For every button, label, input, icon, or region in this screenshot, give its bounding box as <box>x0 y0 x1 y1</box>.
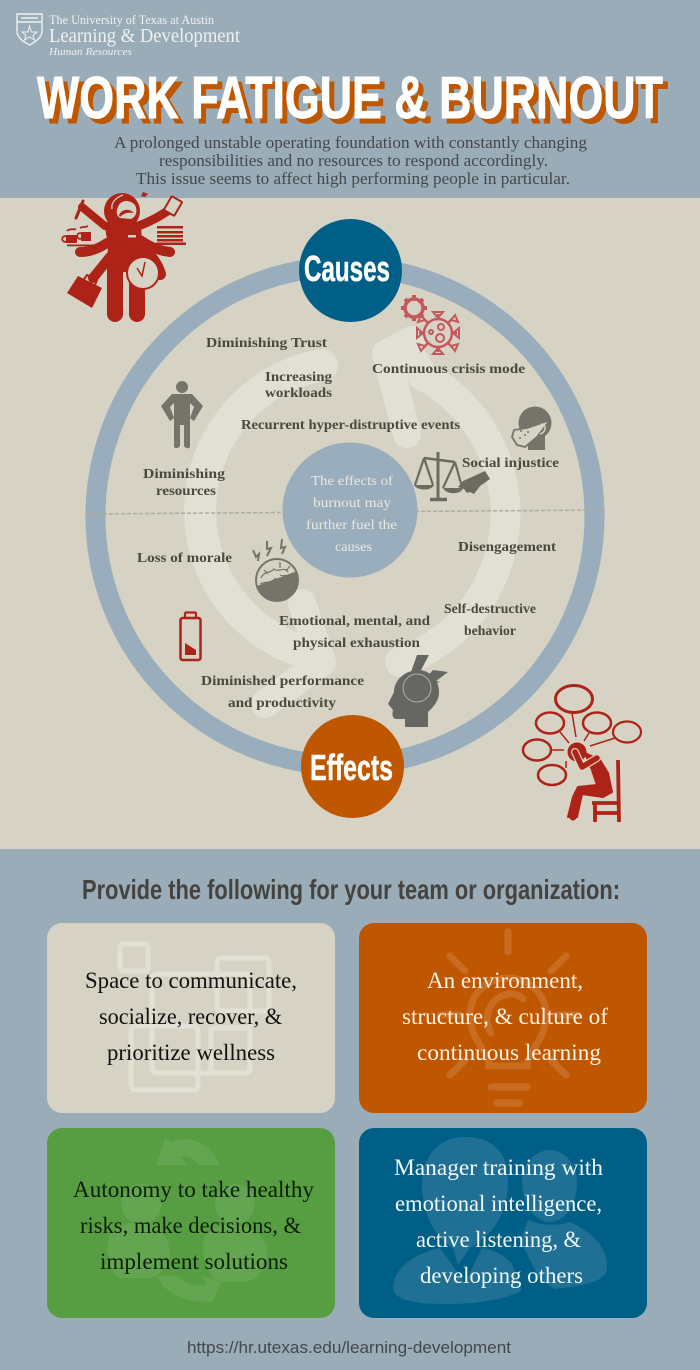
center circle: The effects of <box>311 474 393 489</box>
label: diminishing resources: Diminishing <box>143 467 225 482</box>
icon: room blocks <box>120 944 269 1090</box>
icon: cycle of people <box>107 1138 267 1302</box>
icon: virus <box>401 295 459 354</box>
icon: brain under stress <box>253 539 298 601</box>
label: increasing workloads <box>265 370 333 401</box>
card: continuous learning: structure, & culture of <box>402 1004 608 1029</box>
arrow: effects to causes <box>386 340 505 662</box>
label: diminished performance: Diminished performance <box>201 674 364 689</box>
label: diminishing resources: resources <box>156 484 217 499</box>
center circle <box>282 442 418 578</box>
ring <box>96 266 594 766</box>
panel: recommendations <box>0 849 700 1370</box>
label: increasing workloads: Increasing <box>265 370 332 385</box>
subtitle: A prolonged unstable operating foundation with constantly changing <box>114 133 588 152</box>
icon: low battery <box>180 612 200 660</box>
label: self-destructive behavior: Self-destructive <box>444 602 536 617</box>
panel: header <box>0 0 700 198</box>
label: disengagement: Disengagement <box>458 540 556 555</box>
card: continuous learning <box>359 923 647 1113</box>
logo: UT Austin Learning and Development: The University of Texas at Austin <box>49 13 215 27</box>
card: manager training: Manager training with <box>394 1155 603 1180</box>
label: diminished performance: and productivity <box>228 696 336 711</box>
card: manager training <box>359 1128 647 1318</box>
icon: shield <box>17 14 42 45</box>
label: social injustice: Social injustice <box>462 456 559 471</box>
card: space to communicate: Space to communicate, <box>85 968 297 993</box>
icon: masked head <box>512 406 552 450</box>
center circle: causes <box>335 540 372 555</box>
panel: causes and effects <box>0 192 700 849</box>
logo: UT Austin Learning and Development: Learning & Development <box>49 25 240 47</box>
label: diminishing trust: Diminishing Trust <box>206 336 327 351</box>
dashed divider <box>85 510 605 514</box>
logo: UT Austin Learning and Development: Human Resources <box>48 47 132 58</box>
label: diminishing resources <box>143 467 225 499</box>
center circle: further fuel the <box>306 518 397 533</box>
center circle: burnout may <box>313 496 391 511</box>
card: manager training: developing others <box>420 1263 583 1288</box>
label: recurrent events: Recurrent hyper-distruptive events <box>241 418 461 433</box>
label: exhaustion: physical exhaustion <box>293 636 420 651</box>
label: increasing workloads: workloads <box>265 386 333 401</box>
subtitle: This issue seems to affect high performing people in particular. <box>136 169 570 188</box>
card: continuous learning: An environment, <box>427 968 583 993</box>
label: self-destructive behavior <box>444 602 536 639</box>
badge: causes: Causes <box>304 248 390 289</box>
icon: overwhelmed multitasking worker <box>62 192 186 314</box>
label: continuous crisis mode: Continuous crisis mode <box>372 362 525 377</box>
card: manager training: active listening, & <box>416 1227 581 1252</box>
icon: mentor silhouettes <box>393 1137 607 1304</box>
card: autonomy <box>47 1128 335 1318</box>
card: autonomy: implement solutions <box>100 1249 288 1274</box>
card: continuous learning: continuous learning <box>417 1040 602 1065</box>
card: space to communicate: prioritize wellness <box>107 1040 275 1065</box>
logo: UT Austin Learning and Development <box>17 13 240 58</box>
badge: effects <box>301 715 404 818</box>
label: self-destructive behavior: behavior <box>464 624 516 639</box>
subtitle <box>114 133 588 188</box>
icon: light bulb <box>440 932 578 1103</box>
label: exhaustion <box>279 614 430 651</box>
label: exhaustion: Emotional, mental, and <box>279 614 430 629</box>
icon: overwhelmed seated person with thought bubbles <box>523 686 641 822</box>
label: diminished performance <box>201 674 364 711</box>
badge: effects: Effects <box>310 747 393 788</box>
card: manager training: emotional intelligence, <box>395 1191 602 1216</box>
arrow: causes to effects <box>200 365 322 704</box>
icon: scales of justice and hand <box>414 452 490 500</box>
label: loss of morale: Loss of morale <box>137 551 232 566</box>
card: autonomy: Autonomy to take healthy <box>73 1177 314 1202</box>
badge: causes <box>299 219 402 322</box>
card: autonomy: risks, make decisions, & <box>80 1213 301 1238</box>
subtitle: responsibilities and no resources to respond accordingly. <box>159 151 548 170</box>
footer url: https://hr.utexas.edu/learning-development <box>187 1338 511 1357</box>
card: space to communicate: socialize, recover, & <box>99 1004 282 1029</box>
icon: head with lightning <box>388 655 448 727</box>
icon: person hands on hips <box>161 381 203 448</box>
card: space to communicate <box>47 923 335 1113</box>
